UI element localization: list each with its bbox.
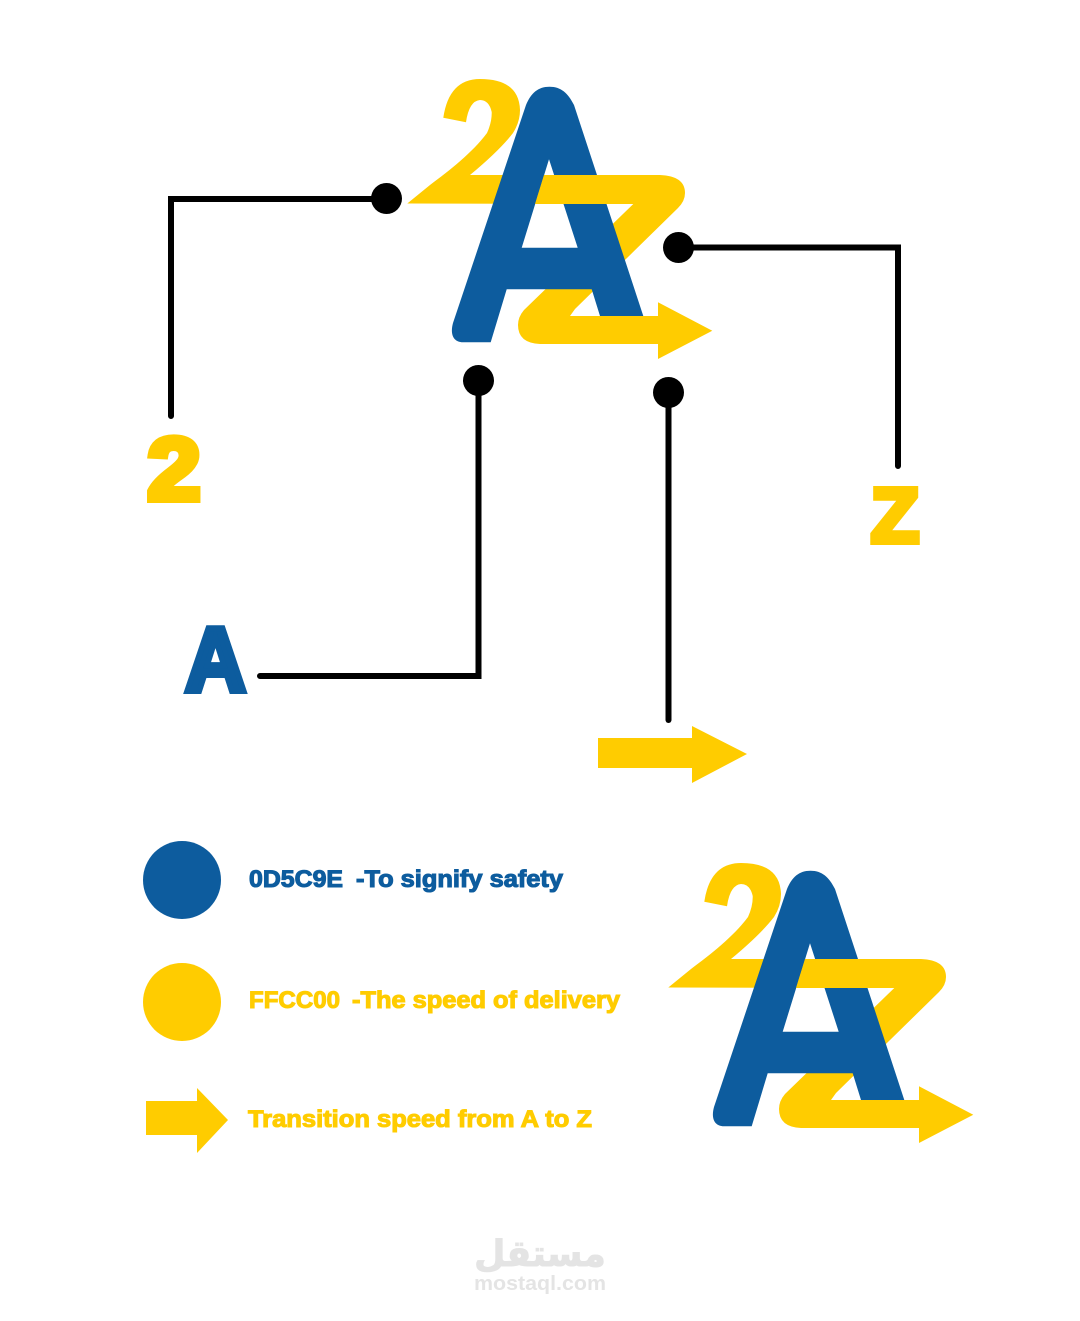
legend: yellow text: -The speed of delivery (352, 987, 621, 1014)
label: Z: Z (871, 473, 919, 559)
watermark (474, 1234, 606, 1295)
connector: 2 (171, 183, 402, 416)
secondary logo (668, 863, 973, 1143)
legend: blue text (249, 866, 564, 893)
legend: blue text: 0D5C9E (249, 866, 343, 893)
watermark: مستقل (474, 1234, 606, 1275)
label: 2: 2 (148, 420, 200, 518)
legend: blue swatch (143, 841, 221, 919)
connector: arrow (653, 377, 684, 720)
main logo (407, 79, 712, 359)
legend: yellow text: FFCC00 (249, 987, 340, 1014)
legend: blue text: -To signify safety (356, 866, 564, 893)
connector: A (260, 365, 494, 676)
icon: yellow arrow (598, 726, 747, 783)
legend: arrow text: Transition speed from A to Z (248, 1106, 592, 1133)
label: A: A (185, 610, 246, 711)
watermark: mostaql.com (474, 1273, 606, 1295)
legend: yellow text (249, 987, 621, 1014)
connector: Z (663, 232, 898, 466)
legend: yellow swatch (143, 963, 221, 1041)
legend: arrow icon (146, 1088, 228, 1153)
